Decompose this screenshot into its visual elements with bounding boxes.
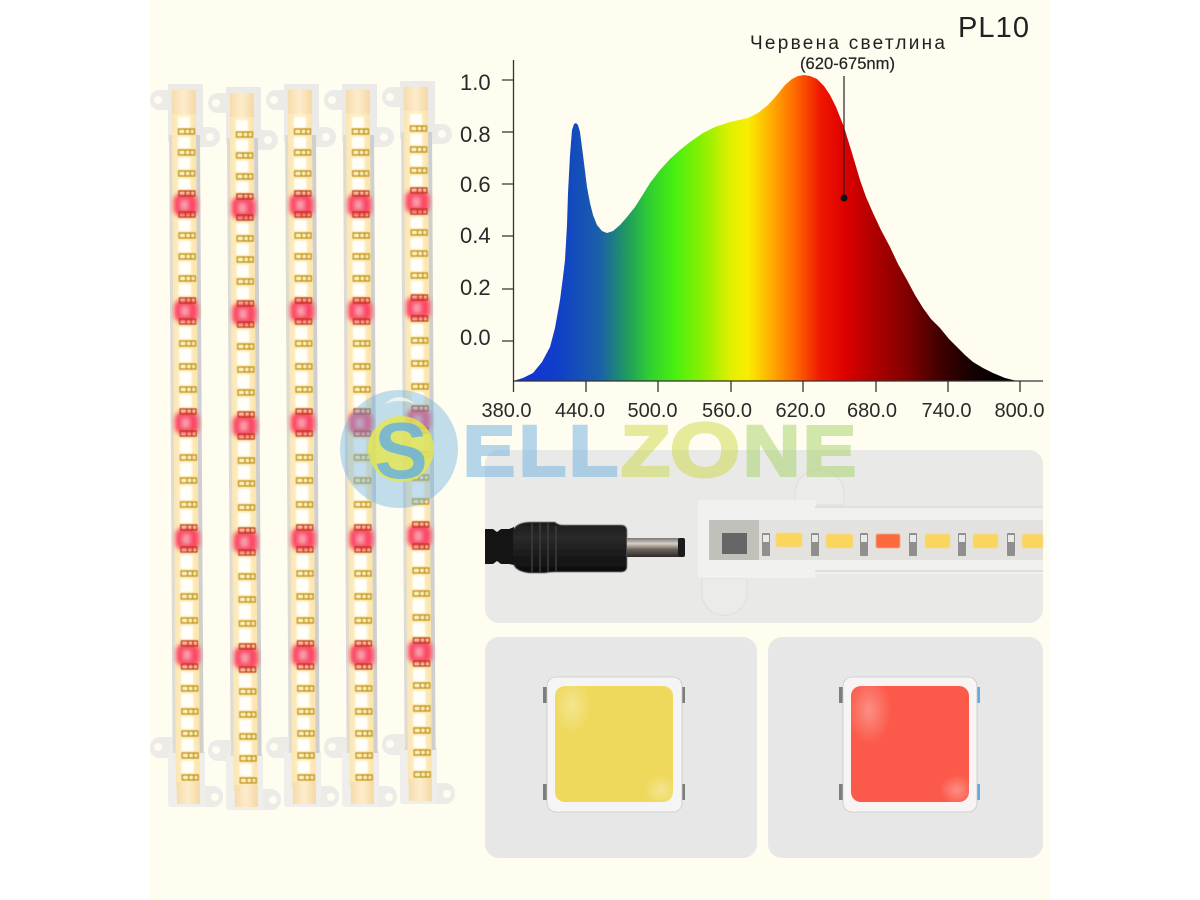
LED strips group bbox=[150, 81, 455, 810]
icon: mounting ears bbox=[702, 470, 844, 616]
y axis labels: 0.8 bbox=[460, 122, 491, 147]
x axis labels: 500.0 bbox=[627, 400, 678, 422]
LED strip 2 bbox=[208, 87, 281, 810]
icon: watermark logo: S bbox=[374, 406, 428, 495]
watermark letters: ZONE: Z bbox=[621, 412, 670, 492]
x axis labels: 560.0 bbox=[702, 400, 752, 422]
y axis labels: 0.6 bbox=[460, 172, 491, 197]
axes and ticks bbox=[502, 60, 1043, 392]
LED strip 4 bbox=[324, 84, 397, 807]
y axis labels bbox=[460, 70, 491, 350]
icon: power plug bbox=[485, 522, 685, 573]
watermark letters: ZONE: E bbox=[803, 412, 856, 492]
icon: strip end with LEDs bbox=[698, 500, 1043, 578]
x axis labels: 380.0 bbox=[481, 400, 532, 422]
x axis labels: 740.0 bbox=[921, 400, 972, 422]
watermark letters: ELL: L bbox=[519, 412, 566, 492]
watermark letters: ELL bbox=[463, 412, 618, 492]
panel: red LED chip bbox=[768, 637, 1043, 858]
icon: warm white LED bbox=[543, 677, 685, 812]
LED strip 1 bbox=[150, 84, 223, 807]
watermark letters: ZONE: N bbox=[743, 412, 800, 492]
watermark letters: ELL: L bbox=[569, 412, 618, 492]
x axis labels: 440.0 bbox=[555, 400, 605, 422]
watermark letters: ZONE: O bbox=[670, 408, 740, 494]
y axis labels: 0.0 bbox=[460, 325, 491, 350]
y axis labels: 1.0 bbox=[460, 70, 491, 95]
LED strip 3 bbox=[266, 84, 339, 807]
red light wavelength range: (620-675nm) bbox=[800, 54, 895, 73]
x axis labels: 620.0 bbox=[775, 400, 826, 422]
y axis labels: 0.2 bbox=[460, 275, 491, 300]
LED strip 5 bbox=[382, 81, 455, 804]
page background bbox=[150, 0, 1050, 900]
spectrum chart bbox=[460, 60, 1045, 422]
watermark letters: ZONE bbox=[621, 408, 856, 494]
icon: red LED bbox=[839, 676, 980, 812]
spectrum curve bbox=[513, 75, 1017, 381]
y axis labels: 0.4 bbox=[460, 223, 491, 248]
panel: warm white LED chip bbox=[485, 637, 757, 858]
x axis labels bbox=[481, 400, 1045, 422]
icon: watermark logo bbox=[340, 390, 458, 508]
model title: PL10 bbox=[958, 12, 1029, 44]
x axis labels: 680.0 bbox=[847, 400, 897, 422]
red light label: Червена светлина bbox=[750, 33, 945, 54]
watermark: SELLZONE bbox=[340, 390, 856, 508]
callout: red light pointer bbox=[840, 76, 848, 202]
panel: connector bbox=[485, 450, 1043, 623]
x axis labels: 800.0 bbox=[994, 400, 1045, 422]
watermark letters: ELL: E bbox=[463, 412, 515, 492]
